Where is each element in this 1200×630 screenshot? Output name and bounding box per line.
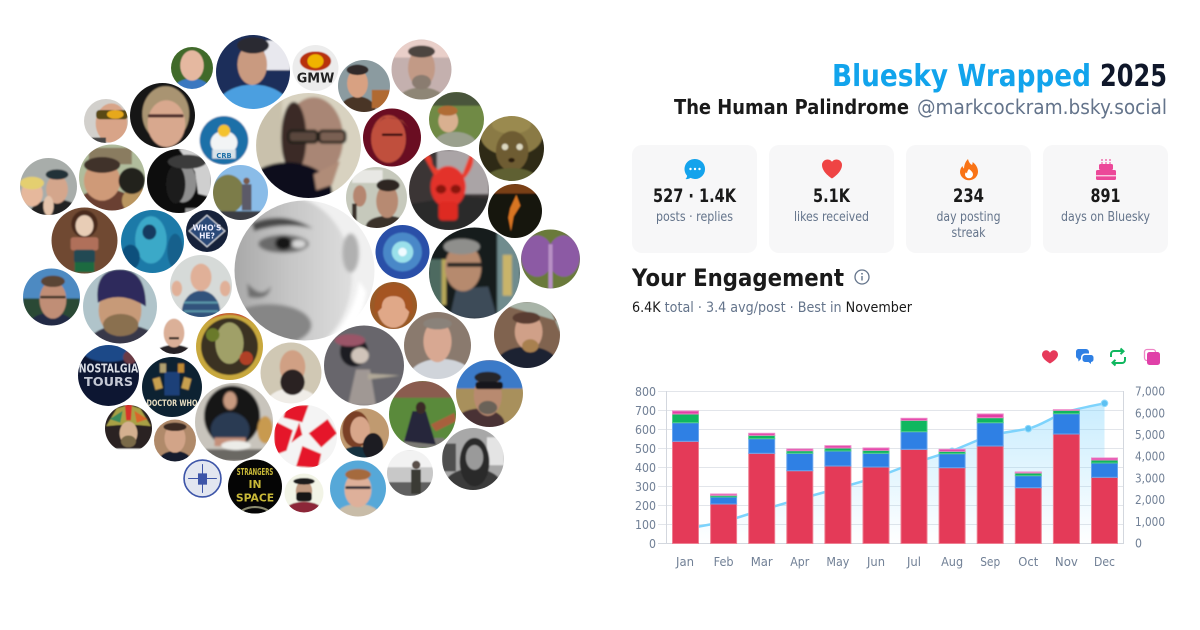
avatar: woman with glasses (130, 83, 195, 148)
avatar: ginger-bearded man in glasses (494, 302, 560, 368)
avatar: bald man with long dark beard (260, 342, 322, 404)
avatar: man in blue shirt (216, 35, 290, 109)
avatar: colourful head cartoon (103, 403, 154, 454)
icon: quotes (1144, 350, 1160, 365)
bars: Jun (863, 448, 889, 544)
right axis labels (1135, 384, 1165, 550)
right axis labels: 3,000 (1135, 471, 1165, 485)
right axis labels: 7,000 (1135, 384, 1165, 398)
stat card: posts and replies: posts · replies (656, 210, 733, 225)
avatar: Doctor in straw hat (479, 116, 544, 181)
bars: Aug (939, 449, 965, 544)
avatar: smiling man in blue shirt (171, 47, 213, 89)
cumulative line (686, 403, 1104, 529)
month labels: Jan (675, 555, 694, 569)
stat card: posts and replies (632, 145, 757, 253)
title: 2025 (1100, 59, 1167, 94)
month labels: Sep (980, 555, 1000, 569)
icon: info (855, 270, 869, 284)
bars: Jan (672, 411, 698, 544)
icon: likes (1042, 350, 1058, 364)
bars: Oct (1015, 472, 1041, 544)
avatar: couple selfie (20, 158, 77, 215)
avatar: person at the seaside (385, 448, 435, 498)
month labels: Dec (1094, 555, 1115, 569)
cumulative area (686, 403, 1104, 544)
bars: Feb (711, 494, 737, 544)
stat card: posting streak: 234 (953, 185, 984, 207)
avatar: man in egg chair (195, 383, 273, 461)
avatar: man by the lake (23, 268, 80, 326)
avatar: man holding sign (346, 167, 407, 228)
avatar: grey doll figure (324, 326, 404, 406)
month labels: Apr (790, 555, 809, 569)
avatar: profile owner, black and white close-up (234, 200, 374, 340)
avatar: woman in black top (152, 417, 198, 472)
legend icons (1042, 348, 1160, 366)
stat card: days on Bluesky: days on Bluesky (1061, 210, 1150, 225)
stat card: posting streak: day posting (936, 210, 1000, 225)
avatar: man in yellow sunglasses (84, 99, 128, 143)
title: Bluesky Wrapped (832, 59, 1091, 94)
avatar: red and white checkered ball (271, 402, 340, 471)
month labels: Aug (941, 555, 963, 569)
stat card: posting streak: streak (952, 226, 986, 241)
avatar: County Road Bobblers badge (198, 115, 250, 165)
stat card: days on Bluesky (1043, 145, 1168, 253)
right axis labels: 0 (1135, 536, 1142, 550)
avatar: GMW logo (292, 45, 338, 91)
stat card: posts and replies: 527 · 1.4K (653, 185, 737, 207)
display name and handle: The Human Palindrome (674, 95, 909, 119)
avatar: Doctor Who tarot (142, 357, 202, 417)
avatar: red-toned woman with glasses (363, 108, 421, 166)
bars: Mar (749, 433, 775, 544)
avatar cloud (17, 31, 583, 529)
icon: replies (1076, 349, 1094, 364)
avatar: boy on grass (429, 92, 484, 147)
stat card: posting streak (906, 145, 1031, 253)
stat card: days on Bluesky: 891 (1090, 185, 1120, 207)
icon: heart (822, 159, 842, 178)
left axis labels: 100 (635, 518, 656, 532)
avatar: bald man with glasses (256, 93, 361, 198)
stat card: likes: likes received (794, 210, 869, 225)
right axis labels: 5,000 (1135, 428, 1165, 442)
right axis labels: 2,000 (1135, 493, 1165, 507)
avatar: tree face artwork (196, 313, 263, 380)
stat card: likes: 5.1K (813, 185, 851, 207)
avatar: Who's He podcast (186, 210, 228, 252)
avatar: Astro City badge (180, 456, 225, 501)
avatar: woman in garden (386, 378, 459, 451)
avatar: statue under blue sky (213, 165, 268, 220)
avatar: bald man with moustache (160, 318, 188, 354)
display name and handle: @markcockram.bsky.social (917, 95, 1167, 119)
icon: flame (960, 159, 978, 180)
month labels: Mar (751, 555, 773, 569)
bars: Nov (1053, 410, 1079, 544)
month labels: Nov (1055, 555, 1078, 569)
left axis labels: 400 (635, 461, 656, 475)
avatar: bearded man in beanie (83, 270, 157, 344)
month labels: Oct (1018, 555, 1039, 569)
avatar: dark painting (488, 184, 542, 238)
left axis labels: 600 (635, 423, 656, 437)
chart: monthly engagement (635, 384, 1165, 569)
left axis labels: 0 (649, 537, 656, 551)
avatar: black and white bearded man (147, 149, 211, 213)
bars: Jul (901, 418, 927, 544)
avatar: man in dark sunglasses (453, 357, 526, 439)
left axis labels: 300 (635, 480, 656, 494)
bars: Dec (1092, 458, 1118, 544)
avatar: red devil skull (409, 150, 489, 230)
bars: May (825, 446, 851, 544)
left axis labels (635, 385, 656, 551)
avatar: black and white long-haired woman (439, 425, 507, 506)
stat card: likes (769, 145, 894, 253)
icon: reposts (1111, 348, 1125, 366)
avatar: purple fungus (521, 230, 580, 288)
avatar: knitted doll (52, 208, 118, 274)
right axis labels: 4,000 (1135, 450, 1165, 464)
heading: Your Engagement: Your Engagement (631, 264, 844, 292)
engagement summary: 6.4K total · 3.4 avg/post · Best in November (632, 300, 912, 316)
avatar: woman with red hair (370, 282, 417, 329)
avatar: man with cityscape (392, 40, 452, 100)
avatar: blue crystal pattern (376, 225, 430, 279)
avatar: man with food (338, 60, 390, 112)
line markers (949, 400, 1108, 454)
left axis labels: 200 (635, 499, 656, 513)
icon: birthday cake (1096, 159, 1116, 180)
month labels: Feb (714, 555, 734, 569)
avatar: graduate in mask (283, 472, 325, 519)
icon: speech bubble (685, 159, 705, 179)
left axis labels: 500 (635, 442, 656, 456)
avatar: grey-haired man at trellis (404, 312, 471, 379)
right axis labels: 6,000 (1135, 406, 1165, 420)
avatar: woman with black cat (338, 406, 391, 466)
avatar: man with glasses on blue background (327, 458, 389, 529)
left axis labels: 800 (635, 385, 656, 399)
avatar: man in striped shirt (170, 255, 232, 317)
avatar: Nostalgia Tours (78, 345, 139, 406)
display name and handle (674, 95, 1167, 119)
avatar: Strangers in Space (225, 457, 285, 528)
avatar: blue glowing figure (121, 210, 184, 273)
month labels: Jul (906, 555, 921, 569)
avatar: man with black cat (79, 144, 145, 210)
month labels: Jun (866, 555, 885, 569)
month labels: May (826, 555, 849, 569)
avatar: man with glasses at blue door (429, 228, 520, 318)
bars: Sep (977, 414, 1003, 544)
right axis labels: 1,000 (1135, 515, 1165, 529)
chart grid (658, 391, 1124, 544)
month labels (675, 555, 1115, 569)
bars: Apr (787, 449, 813, 544)
left axis labels: 700 (635, 404, 656, 418)
